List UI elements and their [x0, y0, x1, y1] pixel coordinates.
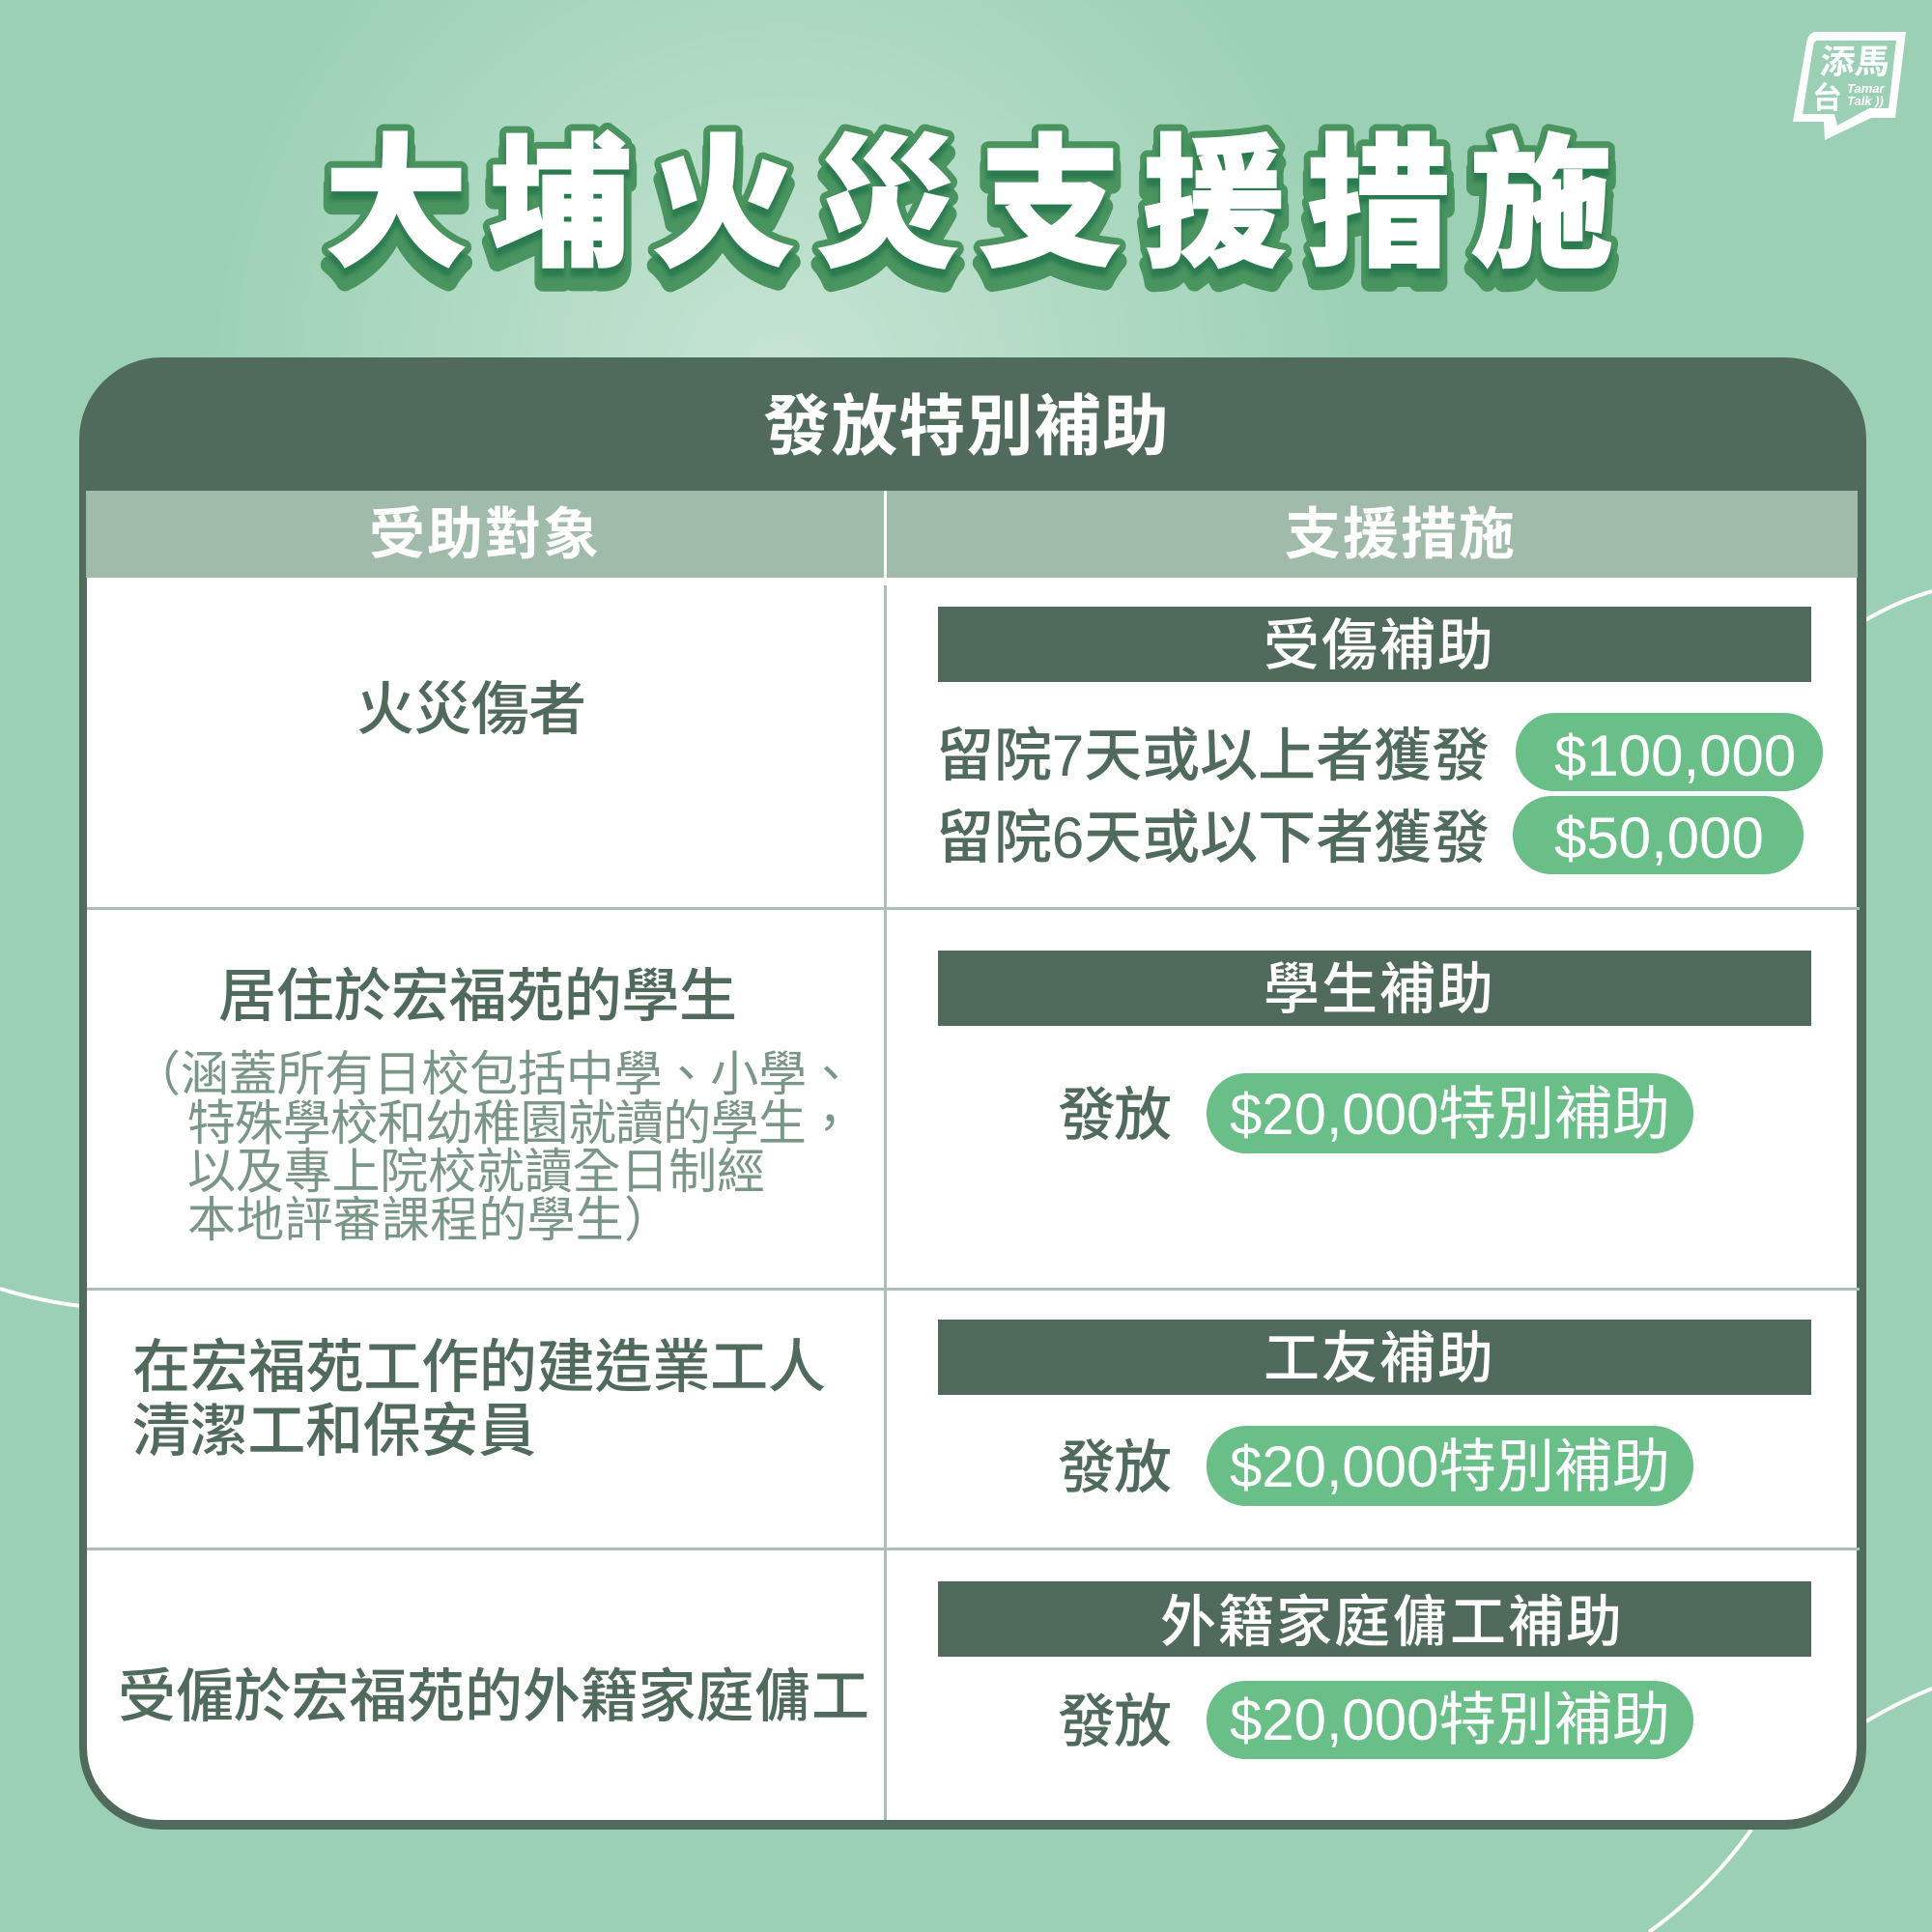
row: injured: [356, 607, 1823, 874]
logo: Tamar Talk speech bubble: [1793, 32, 1906, 140]
pill: $20,000 worker: $20,000特別補助: [1230, 1435, 1670, 1499]
label: grant: 發放: [1058, 1083, 1172, 1148]
subheader: worker subsidy: 工友補助: [1264, 1327, 1493, 1390]
recipient: domestic helpers: 受僱於宏福苑的外籍家庭傭工: [118, 1664, 869, 1729]
label: grant: 發放: [1058, 1435, 1172, 1500]
column header row: 受助對象: [369, 503, 599, 566]
note: eligible schools: 特殊學校和幼稚園就讀的學生，: [187, 1096, 854, 1151]
label: grant: 發放: [1058, 1690, 1172, 1754]
subheader: domestic helper subsidy: [938, 1581, 1811, 1657]
table card: [79, 357, 1866, 1830]
subheader: injury subsidy: 受傷補助: [1264, 614, 1493, 677]
row: students: [132, 951, 1811, 1247]
title: 大埔火災支援措施: [325, 126, 1613, 285]
line: 6 days or less: 留院6天或以下者獲發: [936, 806, 1490, 870]
subheader: domestic helper subsidy: 外籍家庭傭工補助: [1160, 1591, 1622, 1654]
line: 7 days or more: 留院7天或以上者獲發: [936, 724, 1490, 788]
recipient: workers: 清潔工和保安員: [132, 1399, 536, 1463]
logo: Tamar Talk speech bubble: 台: [1812, 81, 1842, 115]
title: 大埔火災支援措施: [325, 133, 1613, 293]
recipient: workers: 在宏福苑工作的建造業工人: [132, 1335, 826, 1400]
card heading: 發放特別補助: [763, 389, 1169, 464]
note: eligible schools: 以及專上院校就讀全日制經: [187, 1145, 765, 1199]
column header row: [86, 491, 1858, 578]
card frame: [79, 357, 1866, 1830]
note: eligible schools: （涵蓋所有日校包括中學、小學、: [132, 1047, 855, 1101]
pill: $50,000: $50,000: [1554, 806, 1764, 870]
logo: Tamar Talk speech bubble: 添馬: [1818, 43, 1891, 81]
decorative arcs: [0, 591, 1932, 1932]
subheader: student subsidy: 學生補助: [1264, 958, 1493, 1021]
row: workers: [132, 1320, 1811, 1506]
title: 大埔火災支援措施: [325, 141, 1613, 300]
recipient: injured: 火災傷者: [356, 677, 586, 742]
note: eligible schools: [132, 1047, 855, 1247]
recipient: students: 居住於宏福苑的學生: [218, 964, 737, 1029]
note: eligible schools: 本地評審課程的學生）: [187, 1193, 672, 1247]
pill: $100,000: [1516, 713, 1823, 791]
table grid lines: [87, 585, 1860, 1820]
logo: Tamar Talk speech bubble: Tamar: [1847, 81, 1885, 96]
subheader: student subsidy: [938, 951, 1811, 1026]
row: domestic helpers: [118, 1581, 1811, 1759]
pill: $20,000 helper: $20,000特別補助: [1230, 1688, 1670, 1752]
pill: $20,000 student: $20,000特別補助: [1230, 1082, 1670, 1147]
pill: $50,000: [1513, 796, 1804, 874]
subheader: injury subsidy: [938, 607, 1811, 682]
subheader: worker subsidy: [938, 1320, 1811, 1395]
card body: [87, 578, 1857, 1820]
column header row: 支援措施: [1285, 503, 1515, 566]
pill: $100,000: $100,000: [1554, 724, 1796, 788]
title: 大埔火災支援措施: [325, 126, 1613, 285]
logo: Tamar Talk speech bubble: Talk )): [1847, 94, 1884, 108]
recipient: workers: [132, 1335, 826, 1463]
